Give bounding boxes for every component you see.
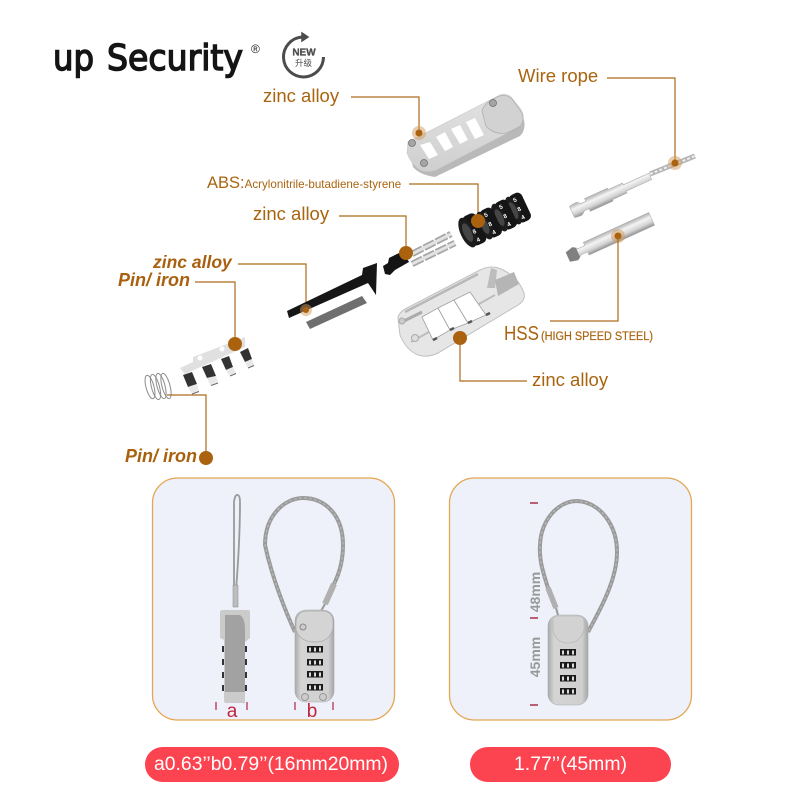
part: top cover [407, 94, 524, 177]
icon: new upgrade badge [284, 33, 324, 77]
part: code wheels: 8 [472, 229, 478, 236]
pin tab tips [188, 359, 254, 393]
label: pin iron, lower: Pin/ iron [125, 446, 197, 466]
pill: width measurement [145, 747, 399, 782]
part: sleeve shafts and black cap [383, 234, 455, 275]
label: pin iron, upper [118, 270, 235, 344]
part: code wheels: 5 [499, 204, 505, 211]
label: wire rope [518, 65, 675, 163]
label: zinc alloy, rod [152, 252, 306, 309]
label: ABS material [207, 174, 478, 221]
label: pin iron, lower [125, 395, 213, 466]
pin tabs [183, 348, 252, 387]
label: zinc alloy, top cover [263, 85, 419, 133]
label: HSS high speed steel: HSS [504, 323, 539, 345]
part: high speed steel pin [565, 212, 655, 263]
pill: width measurement: a0.63’’b0.79’’(16mm20mm) [154, 754, 388, 775]
logo: upSecurity: ® [251, 42, 260, 56]
label: zinc alloy, bottom cover [460, 338, 609, 390]
bottom cover windows [422, 292, 486, 340]
label: HSS high speed steel: (HIGH SPEED STEEL) [541, 329, 653, 343]
height marks and labels: 45mm [527, 637, 543, 677]
part: spring [143, 372, 173, 401]
part: bottom cover [398, 267, 524, 356]
cover windows [420, 118, 484, 159]
part: code wheels: 8 [503, 213, 509, 220]
part: code wheels [454, 191, 533, 250]
dimension marks a and b: a [227, 701, 238, 722]
label: ABS material: ABS:Acrylonitrile-butadiene-styrene [207, 174, 401, 192]
part: code wheels: 8 [488, 221, 494, 228]
side view lock [220, 495, 250, 703]
part: code wheels: 4 [507, 221, 513, 229]
label: zinc alloy, top cover: zinc alloy [263, 85, 340, 106]
height marks and labels [527, 503, 543, 705]
dimension marks a and b [216, 701, 333, 722]
part: code wheels: 5 [484, 212, 490, 219]
panel: height dimensions [450, 478, 692, 720]
label: HSS high speed steel [504, 236, 653, 345]
label: zinc alloy, bottom cover: zinc alloy [532, 369, 609, 390]
pill: height measurement [470, 747, 671, 782]
panel: width dimensions [152, 478, 394, 722]
label: wire rope: Wire rope [518, 65, 598, 86]
part: code wheels: 4 [492, 229, 498, 237]
icon: new upgrade badge: NEW [292, 48, 316, 58]
label: zinc alloy, sleeve [253, 203, 406, 253]
label: zinc alloy, rod: zinc alloy [152, 252, 233, 272]
label: zinc alloy, sleeve: zinc alloy [253, 203, 330, 224]
logo: upSecurity: Security [107, 38, 243, 79]
part: pin plate [180, 337, 254, 394]
part: code wheels: 8 [517, 206, 523, 213]
part: black rod and grey plate [287, 263, 377, 329]
part: code wheels: 4 [476, 237, 482, 244]
pill: height measurement: 1.77’’(45mm) [514, 754, 627, 775]
label: pin iron, upper: Pin/ iron [118, 270, 190, 290]
height marks and labels: 48mm [527, 572, 543, 612]
part: code wheels: 5 [513, 197, 519, 204]
front lock [540, 501, 617, 705]
front view lock [265, 498, 343, 702]
part: pin with wire rope [569, 156, 695, 218]
icon: new upgrade badge: 升级 [295, 58, 312, 68]
logo: upSecurity: up [53, 38, 94, 79]
cover screw holes [408, 100, 496, 166]
dimension marks a and b: b [307, 701, 317, 722]
part: code wheels: 4 [521, 214, 527, 222]
